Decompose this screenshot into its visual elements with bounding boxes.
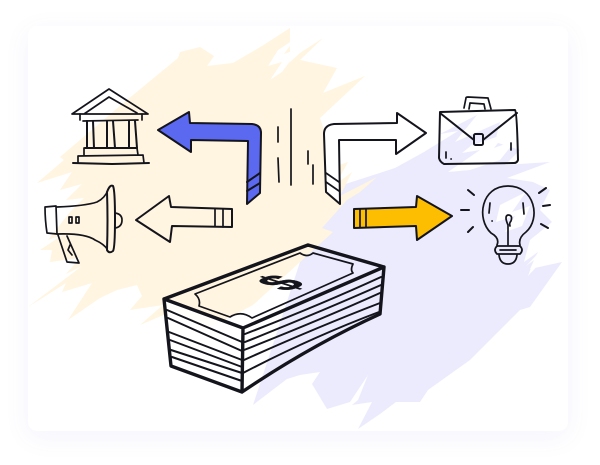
icon: stack of money (164, 245, 384, 392)
bill outline (195, 253, 353, 318)
icon: megaphone (45, 186, 122, 263)
icon: briefcase (439, 97, 518, 164)
arrow: blue to bank (158, 112, 261, 204)
dollar sign: $ (243, 270, 318, 295)
panel: white card (28, 26, 568, 431)
icon: lightbulb (461, 186, 550, 264)
brush stroke: lavender (253, 115, 562, 429)
brush stroke: cream (28, 28, 377, 330)
motion lines (278, 109, 313, 185)
icon: bank (72, 89, 149, 164)
arrow: white to briefcase (324, 113, 426, 204)
arrow: white to megaphone (136, 196, 232, 242)
arrow: yellow to lightbulb (354, 196, 452, 240)
